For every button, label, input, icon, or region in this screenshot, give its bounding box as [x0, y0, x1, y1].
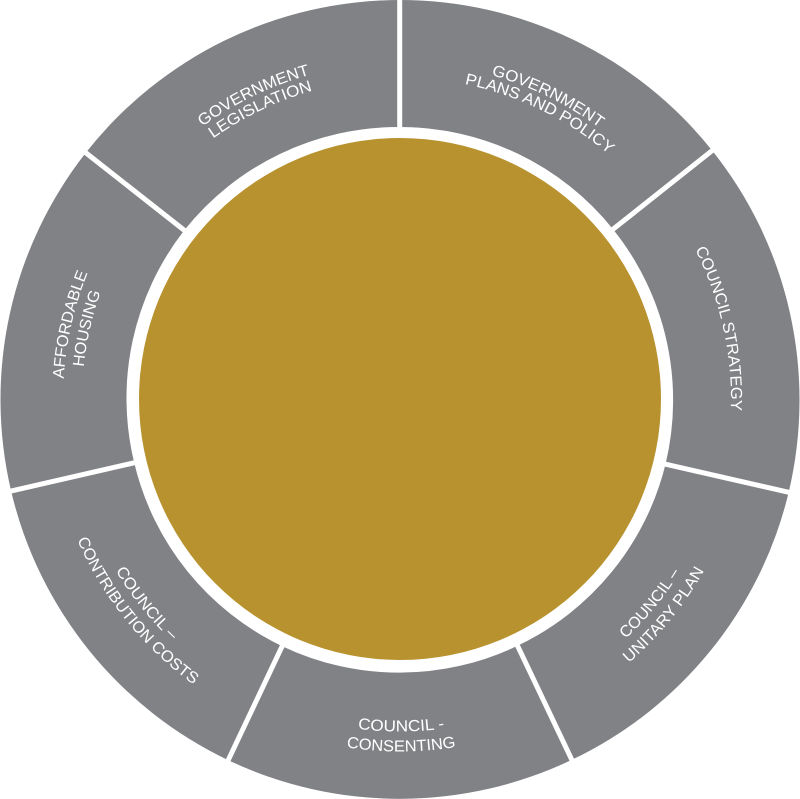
segment: government plans and policy	[402, 0, 710, 228]
segment: council strategy: COUNCIL STRATEGY	[697, 247, 742, 411]
segment: council consenting	[230, 646, 570, 799]
segment: affordable housing: HOUSING	[72, 290, 100, 366]
segment: council unitary plan: COUNCIL –	[620, 570, 677, 636]
segment: government legislation	[88, 0, 398, 228]
segment: government plans and policy: GOVERNMENT	[493, 66, 606, 126]
segment: council unitary plan: UNITARY PLAN	[622, 566, 704, 661]
segment: council contribution costs	[12, 465, 280, 759]
segment: council unitary plan	[520, 466, 788, 759]
segment: council consenting: COUNCIL -	[359, 718, 444, 732]
segment: council contribution costs: CONTRIBUTION COSTS	[79, 538, 198, 683]
segment: council contribution costs: COUNCIL –	[118, 567, 175, 638]
segment: affordable housing	[0, 154, 183, 488]
central gold circle	[139, 138, 661, 660]
segment: council consenting: CONSENTING	[348, 736, 454, 752]
segment: government legislation: LEGISLATION	[208, 80, 312, 138]
segment: government plans and policy: PLANS AND POLICY	[466, 74, 616, 152]
segment: government legislation: GOVERNMENT	[198, 64, 307, 124]
segment: affordable housing: AFFORDABLE	[53, 270, 88, 379]
segment: council strategy	[614, 152, 800, 490]
